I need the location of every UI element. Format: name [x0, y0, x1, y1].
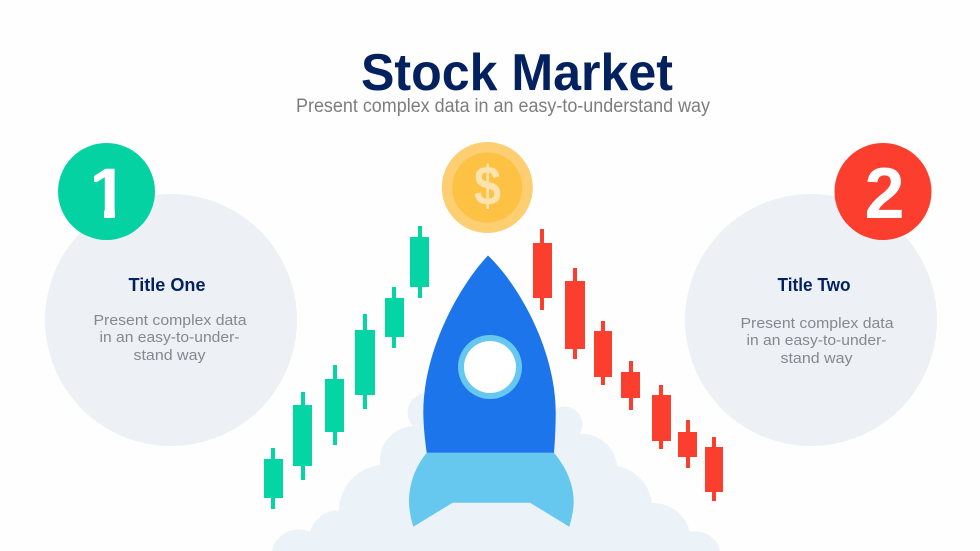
panel background circle [45, 194, 297, 446]
title: Stock Market [361, 44, 673, 102]
panel background circle [685, 194, 937, 446]
number badge 1 [58, 143, 155, 240]
rocket body [423, 256, 556, 453]
text block: title two: in an easy-to-under- [746, 332, 886, 349]
rocket [409, 256, 574, 527]
coin: $ [474, 154, 501, 217]
number badge 2 [834, 143, 932, 240]
rocket fins [409, 453, 574, 527]
text block: title one: stand way [134, 347, 206, 364]
heading: title one: Title One [128, 275, 206, 295]
panel: title one [45, 143, 297, 446]
rocket window [458, 335, 522, 399]
number badge 2: 2 [864, 154, 905, 234]
text block: title one: Present complex data [94, 312, 247, 329]
text block: title two: stand way [780, 350, 853, 367]
heading: title two: Title Two [778, 275, 850, 295]
rising green candlesticks [264, 226, 429, 509]
text block: title two: Present complex data [740, 315, 894, 332]
text block: title two [740, 315, 894, 367]
text block: title one: in an easy-to-under- [100, 329, 240, 346]
falling red candlesticks [533, 229, 723, 501]
coin [442, 142, 533, 233]
cloud [272, 393, 720, 551]
number badge 1: 1 [88, 155, 128, 234]
text block: title one [94, 312, 247, 364]
panel: title two [685, 143, 937, 446]
subtitle: Present complex data in an easy-to-understand way [296, 96, 710, 117]
